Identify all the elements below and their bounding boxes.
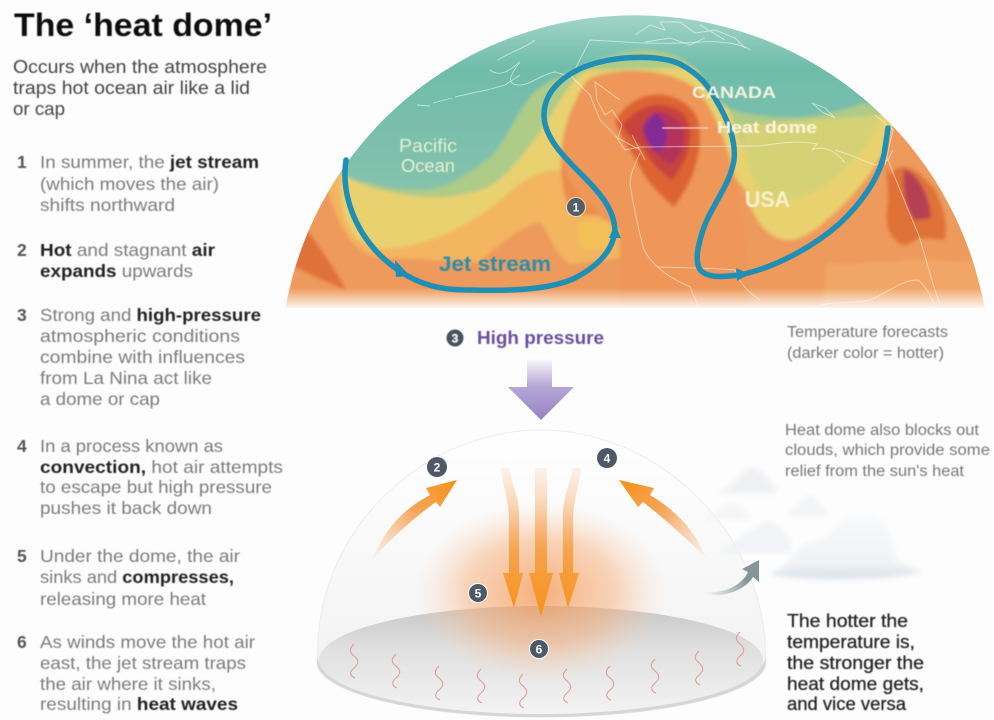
step 6: the air where it sinks, — [40, 674, 216, 694]
badge 1: 1 — [573, 200, 580, 214]
callout: feedback: and vice versa — [787, 694, 907, 714]
arrow: heat to clouds — [704, 560, 759, 595]
high pressure label: 3 — [452, 332, 459, 346]
label: Pacific Ocean: Ocean — [401, 156, 455, 176]
callout: feedback: temperature is, — [787, 632, 915, 652]
heat glow — [416, 502, 666, 682]
intro text: traps hot ocean air like a lid — [13, 77, 250, 98]
globe temperature map — [280, 0, 994, 312]
intro text: or cap — [13, 98, 65, 119]
rising air arrow left — [372, 480, 457, 560]
step 2: expands upwards — [40, 261, 193, 281]
jet stream arrowheads — [395, 224, 749, 281]
step 5: releasing more heat — [40, 589, 206, 609]
intro text: Occurs when the atmosphere — [13, 56, 267, 77]
label: Pacific Ocean — [399, 136, 457, 176]
step 4: 4 — [17, 436, 27, 456]
map outlines — [417, 22, 940, 307]
step 1: shifts northward — [40, 195, 175, 215]
clouds note: Heat dome also blocks out — [785, 422, 980, 439]
step 3: 3 — [17, 305, 27, 325]
badges 2 4 5 6: 6 — [536, 642, 543, 656]
heat squiggles — [350, 632, 744, 708]
step 3: a dome or cap — [40, 389, 160, 409]
step 3: atmospheric conditions — [40, 326, 240, 346]
step 2: Hot and stagnant air — [40, 240, 215, 260]
label: Heat dome with leader line: Heat dome — [717, 118, 817, 137]
badges 2 4 5 6: 4 — [604, 452, 611, 466]
badge 1 — [566, 198, 586, 216]
step 6: As winds move the hot air — [40, 632, 255, 652]
callout: feedback: the stronger the — [787, 653, 924, 673]
step 4: pushes it back down — [40, 498, 212, 518]
step 5: 5 — [17, 546, 27, 566]
callout: feedback: heat dome gets, — [787, 674, 924, 694]
label: Canada: CANADA — [692, 83, 776, 102]
temperature forecast note: (darker color = hotter) — [787, 345, 944, 362]
sinking air arrows — [501, 468, 581, 617]
arrow: high pressure down — [508, 358, 574, 420]
high pressure label: High pressure — [477, 328, 604, 348]
clouds note: relief from the sun's heat — [785, 463, 965, 480]
dome floor — [317, 606, 766, 717]
clouds note: clouds, which provide some — [785, 442, 990, 459]
temperature forecast note: Temperature forecasts — [787, 324, 948, 341]
step 6: resulting in heat waves — [40, 694, 238, 714]
clouds note — [785, 422, 990, 480]
badges 2 4 5 6 — [427, 448, 617, 658]
label: USA: USA — [745, 187, 790, 212]
step 5 — [17, 546, 240, 609]
step 1: In summer, the jet stream — [40, 152, 259, 172]
jet stream arrow path — [345, 57, 888, 290]
intro text — [13, 56, 267, 119]
step 5: sinks and compresses, — [40, 567, 234, 587]
step 1: (which moves the air) — [40, 174, 219, 194]
callout: feedback: The hotter the — [787, 611, 908, 631]
label: Pacific Ocean: Pacific — [399, 136, 457, 156]
step 6 — [17, 632, 255, 714]
numbered steps — [17, 152, 283, 714]
step 3 — [17, 305, 261, 409]
step 3: combine with influences — [40, 347, 245, 367]
step 4: to escape but high pressure — [40, 477, 272, 497]
label: Jet stream: Jet stream — [439, 253, 551, 276]
badges 2 4 5 6: 5 — [475, 586, 482, 600]
step 4: In a process known as — [40, 436, 223, 456]
step 3: Strong and high-pressure — [40, 305, 261, 325]
step 2: 2 — [17, 240, 27, 260]
step 4: convection, hot air attempts — [40, 457, 283, 477]
rising air arrow right — [619, 480, 706, 558]
temperature forecast note — [787, 324, 948, 362]
badges 2 4 5 6: 2 — [434, 460, 441, 474]
step 2 — [17, 240, 215, 281]
dome shell — [317, 430, 766, 717]
step 4 — [17, 436, 283, 518]
title: The ‘heat dome’ — [14, 7, 272, 43]
step 5: Under the dome, the air — [40, 546, 240, 566]
clouds — [703, 468, 923, 579]
step 3: from La Nina act like — [40, 368, 212, 388]
step 6: 6 — [17, 632, 27, 652]
step 1 — [17, 152, 259, 215]
step 6: east, the jet stream traps — [40, 653, 246, 673]
step 1: 1 — [17, 152, 27, 172]
dome illustration — [317, 430, 766, 717]
map labels — [399, 83, 817, 276]
callout: feedback — [787, 611, 924, 714]
